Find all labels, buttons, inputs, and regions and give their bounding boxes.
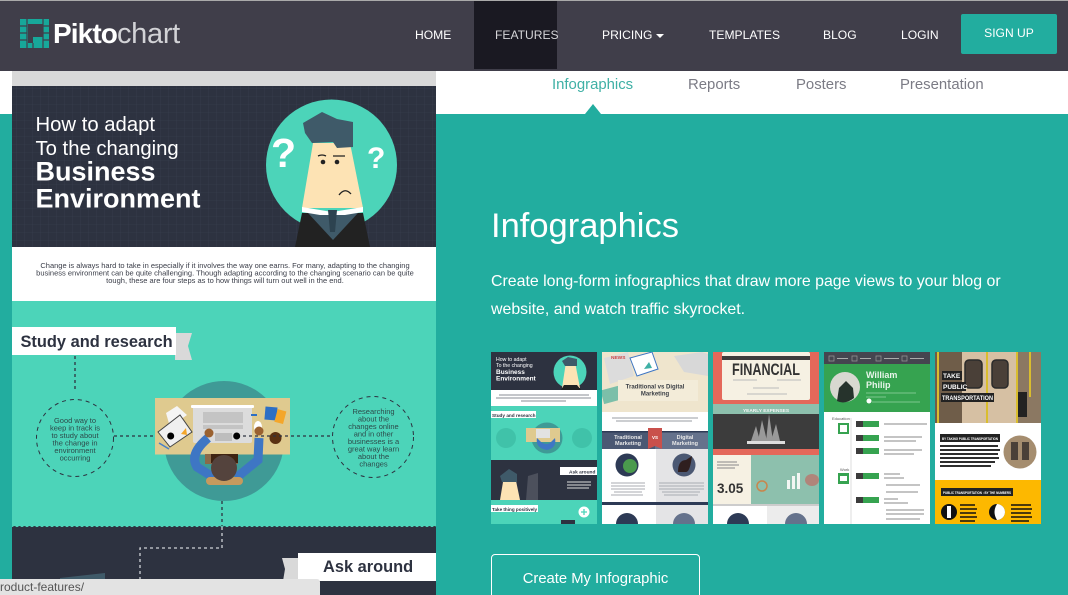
title: Business	[36, 156, 156, 186]
panel: study and research	[12, 301, 436, 528]
thumbnail: business environment: Take thing positively	[492, 507, 538, 512]
description	[491, 273, 1001, 318]
panel: ask around	[12, 501, 436, 595]
callout: left circle	[36, 400, 114, 476]
header panel	[12, 86, 436, 247]
callout: right circle: businesses is a	[348, 437, 400, 446]
sub-navigation tabs: Infographics	[552, 77, 633, 93]
thumbnail: public transportation: PUBLIC TRANSPORTATION : BY THE NUMBERS	[943, 490, 1011, 495]
title: Environment	[36, 184, 201, 214]
thumbnail: william philip resume: Work	[840, 467, 849, 472]
menu links: PRICING	[602, 28, 652, 42]
logo: Piktochart	[53, 18, 180, 50]
thumbnail: financial report: FINANCIAL	[732, 361, 800, 379]
thumbnail: public transportation: TAKE	[943, 373, 961, 380]
panel: infographic preview	[12, 71, 436, 595]
callout: left circle: keep in track is	[50, 424, 100, 432]
heading banner	[282, 553, 436, 581]
menu links: FEATURES	[495, 28, 559, 42]
illustration: person at desk	[155, 381, 333, 501]
intro text: business environment can be quite challenging. Though adapting according to the changing scenario can be quite	[36, 268, 414, 278]
callout: right circle: about the	[358, 414, 389, 424]
browser status bar	[0, 579, 320, 595]
thumbnail: traditional vs digital marketing: NEWS	[611, 355, 626, 361]
navigation bar	[0, 0, 1068, 71]
title	[36, 114, 201, 214]
sub-navigation tabs: Reports	[688, 77, 740, 93]
heading banner: Study and research	[20, 333, 173, 351]
callout: right circle	[332, 396, 414, 478]
thumbnail: traditional vs digital marketing: Marketing	[641, 392, 670, 398]
thumbnail: business environment: To the changing	[496, 363, 533, 369]
callout: right circle: changes online	[348, 422, 399, 431]
section heading: Infographics	[491, 207, 679, 245]
thumbnail: traditional vs digital marketing: Marketing	[615, 441, 641, 447]
icon: confused businessman	[266, 100, 397, 247]
menu links: HOME	[415, 28, 451, 42]
white sub-navigation band	[0, 71, 1068, 114]
thumbnail: public transportation: TRANSPORTATION	[942, 395, 993, 402]
active features tab	[474, 1, 557, 69]
thumbnail: traditional vs digital marketing: Traditional	[614, 435, 642, 441]
sub-navigation tabs	[552, 77, 984, 114]
heading banner	[12, 327, 192, 360]
icon: confused businessman: ?	[271, 130, 296, 176]
callout: right circle: changes	[359, 460, 388, 468]
menu links: TEMPLATES	[709, 28, 780, 42]
sub-navigation tabs: Presentation	[900, 77, 984, 93]
thumbnail: traditional vs digital marketing	[602, 352, 708, 524]
callout: left circle: the change in	[52, 438, 98, 448]
thumbnail: financial report: 3.05	[717, 481, 744, 496]
intro text	[12, 247, 436, 301]
intro text: tough, these are four steps as to how things will turn out well in the end.	[106, 276, 344, 285]
title: To the changing	[36, 138, 179, 160]
thumbnail: william philip resume	[824, 352, 930, 524]
thumbnail: business environment: Business	[496, 369, 525, 376]
menu links	[415, 28, 939, 42]
sub-navigation tabs: Posters	[796, 77, 846, 93]
thumbnail: public transportation: PUBLIC	[943, 384, 968, 391]
sign up button: SIGN UP	[984, 26, 1034, 40]
callout: left circle: Good way to	[54, 416, 96, 425]
menu links: BLOG	[823, 28, 857, 42]
thumbnail: financial report	[713, 352, 819, 524]
callout: left circle: occurring	[60, 454, 90, 462]
thumbnail: traditional vs digital marketing: Digital	[677, 435, 694, 441]
callout: left circle: to study about	[51, 431, 99, 440]
thumbnail: traditional vs digital marketing: VS	[652, 435, 658, 440]
title: How to adapt	[36, 114, 155, 136]
callout: right circle: great way learn	[348, 444, 399, 454]
icon: confused businessman: ?	[367, 142, 385, 175]
sign up button	[961, 14, 1057, 54]
thumbnail: traditional vs digital marketing: Traditional vs Digital	[626, 384, 685, 390]
callout: right circle: and in other	[354, 430, 394, 438]
thumbnail: william philip resume: William	[866, 370, 897, 380]
thumbnail: william philip resume: Education	[832, 416, 850, 421]
thumbnail: public transportation	[935, 352, 1041, 524]
call to action button	[491, 554, 700, 595]
thumbnail: william philip resume: Philip	[866, 380, 891, 390]
thumbnail: financial report: YEARLY EXPENSES	[743, 408, 790, 414]
thumbnail: business environment: Ask around	[569, 470, 595, 476]
browser status bar: roduct-features/	[0, 580, 84, 594]
callout: right circle: Researching	[352, 407, 395, 416]
thumbnail: business environment: Environment	[496, 376, 537, 382]
description: website, and watch traffic skyrocket.	[491, 301, 745, 318]
callout: left circle: environment	[54, 446, 97, 455]
thumbnail: public transportation: BY TAKING PUBLIC TRANSPORTATION	[942, 436, 998, 441]
thumbnail: business environment	[491, 352, 597, 524]
thumbnail: business environment: How to adapt	[496, 357, 527, 363]
thumbnail: traditional vs digital marketing: Marketing	[672, 441, 698, 447]
thumbnail: business environment: Study and research	[492, 413, 536, 418]
call to action button: Create My Infographic	[523, 571, 668, 587]
heading banner: Ask around	[323, 558, 413, 576]
description: Create long-form infographics that draw more page views to your blog or	[491, 273, 1001, 290]
menu links: LOGIN	[901, 28, 939, 42]
intro text: Change is always hard to take in especially if it involves the way one earns. For many, adapting to the changing	[40, 261, 410, 270]
callout: right circle: about the	[358, 452, 389, 461]
